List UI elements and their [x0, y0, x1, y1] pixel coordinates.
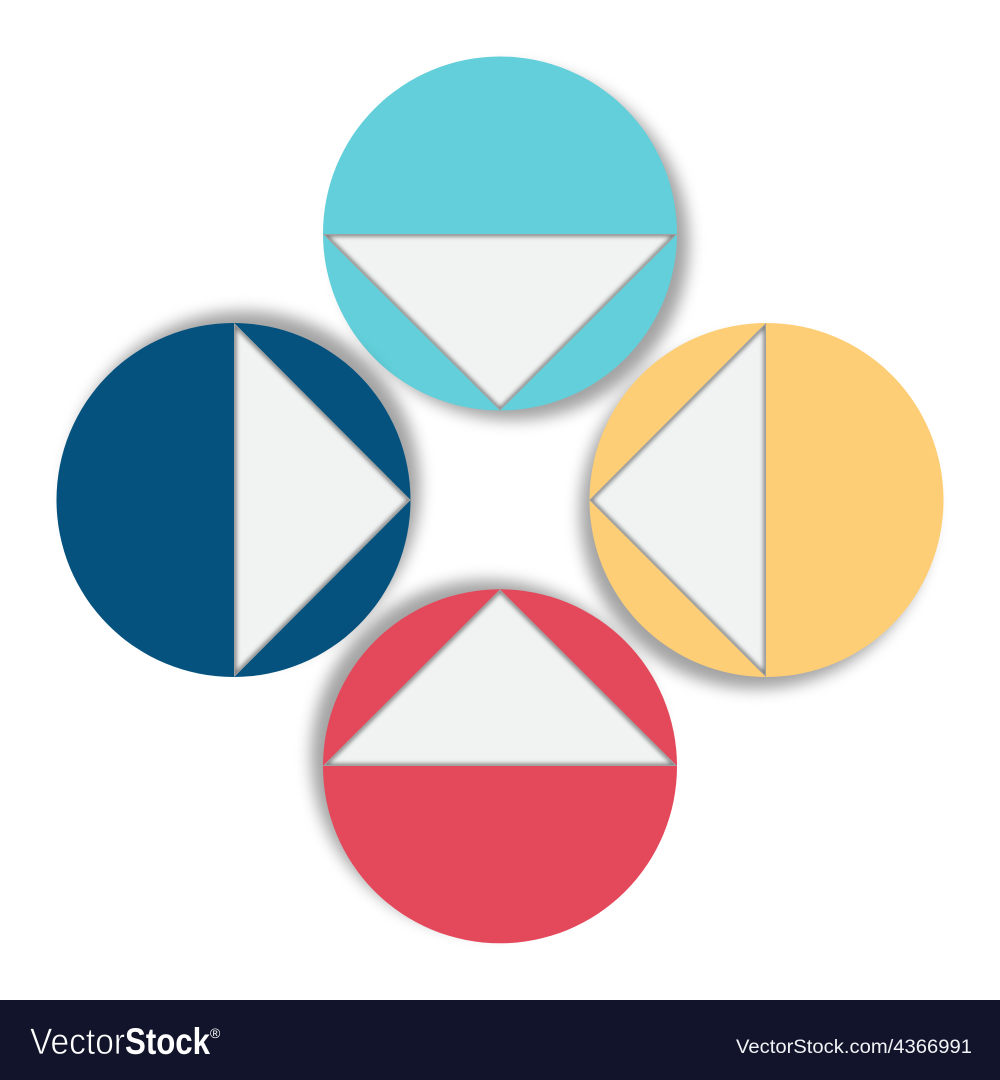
cyan circle shadow [337, 68, 689, 420]
red triangle [323, 590, 677, 766]
footer bar [0, 1000, 1000, 1080]
panel: yellow circle with left triangle [580, 323, 944, 689]
footer logo: ® [210, 1025, 221, 1041]
panel: blue circle with right triangle [56, 311, 420, 677]
panel: cyan circle with downward triangle [323, 56, 689, 420]
cyan triangle [323, 234, 677, 410]
footer image id: VectorStock.com/4366991 [736, 1036, 972, 1058]
red circle shadow [311, 580, 663, 932]
blue circle shadow [68, 311, 420, 663]
panel: red circle with upward triangle [311, 580, 677, 943]
yellow triangle [590, 323, 766, 677]
cyan circle [323, 56, 677, 410]
footer logo: Stock [125, 1021, 210, 1062]
red circle [323, 589, 677, 943]
yellow circle [590, 323, 944, 677]
footer logo: Vector [30, 1021, 125, 1062]
blue circle [56, 323, 410, 677]
footer logo [30, 1021, 221, 1062]
blue triangle [234, 323, 410, 677]
yellow circle shadow [580, 337, 932, 689]
